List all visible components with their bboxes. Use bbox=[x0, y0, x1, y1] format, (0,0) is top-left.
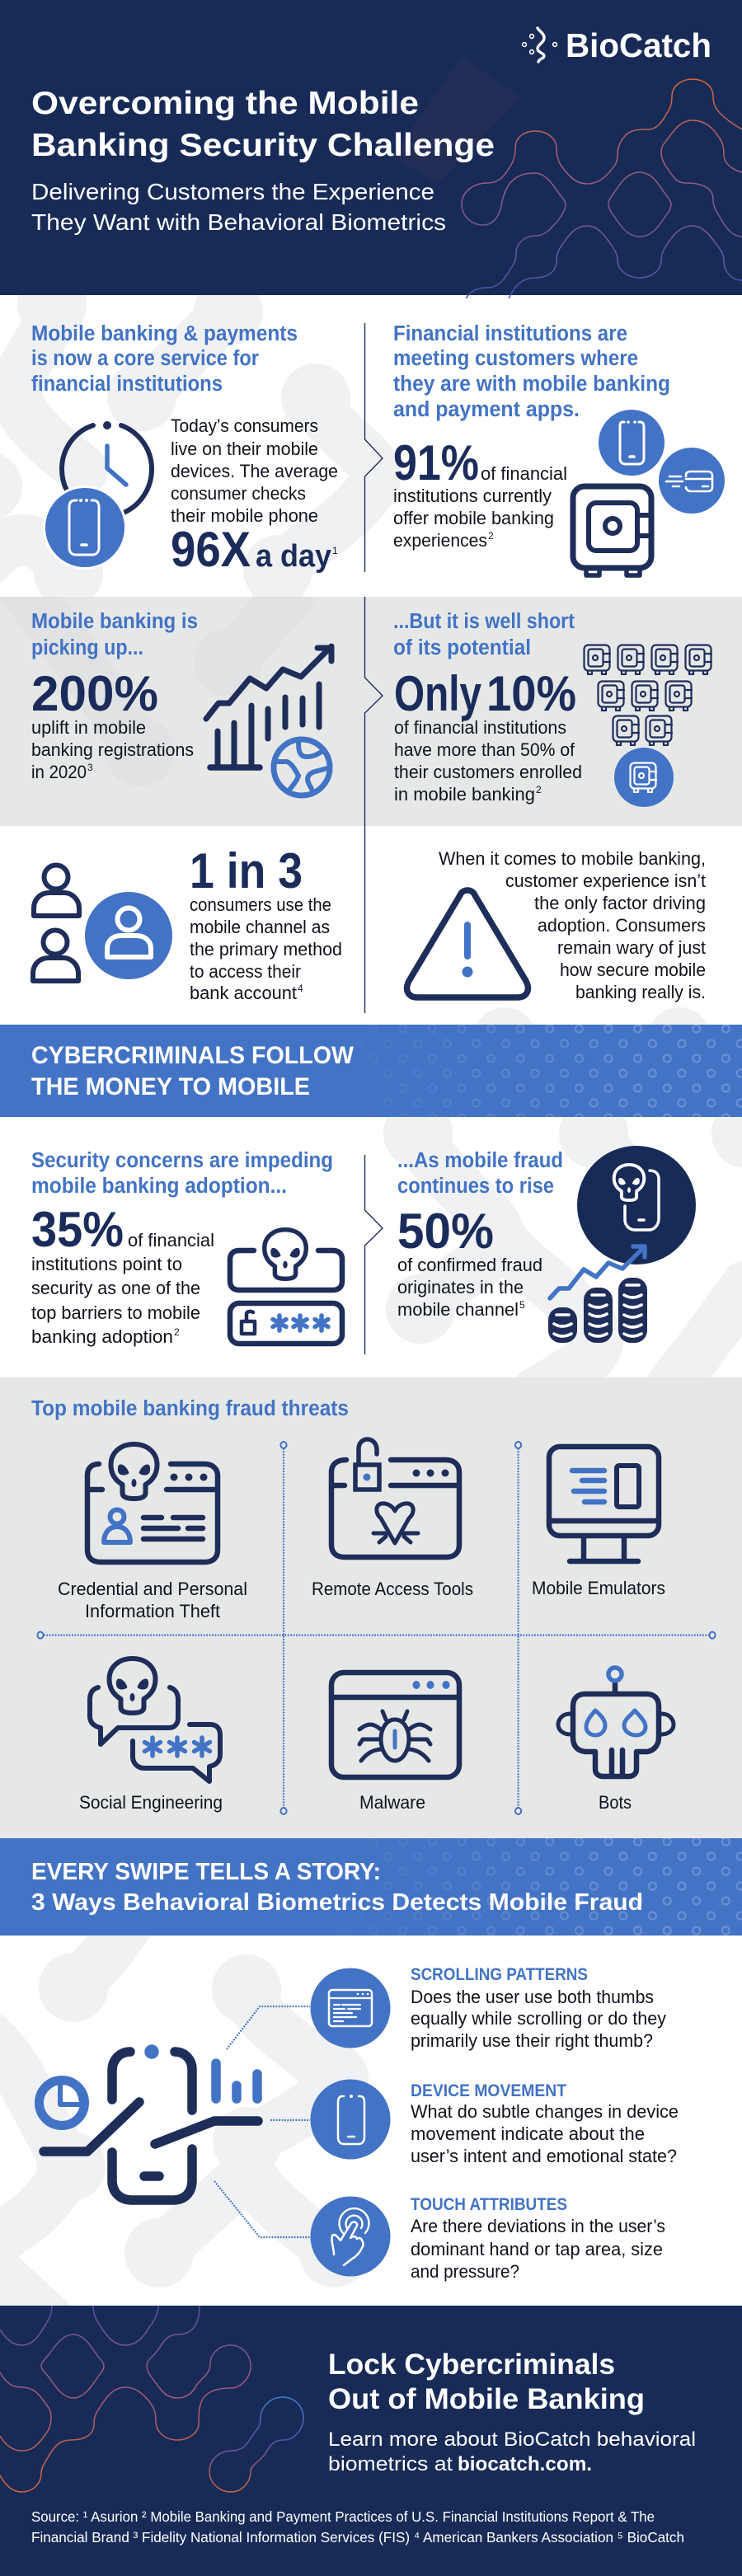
footer network lines bbox=[0, 2306, 303, 2492]
text: SCROLLING PATTERNS bbox=[411, 1965, 588, 1984]
background blobs: fraud section bbox=[383, 1117, 742, 1377]
text bbox=[411, 1965, 667, 2051]
text: today's consumers: devices. The average bbox=[171, 461, 338, 481]
label: Information Theft bbox=[85, 1601, 220, 1621]
text bbox=[439, 848, 707, 1002]
heading: 3 Ways Behavioral Biometrics Detects Mobile Fraud bbox=[31, 1889, 643, 1916]
title bbox=[31, 86, 495, 163]
background blobs: biometrics section bbox=[0, 1917, 369, 2320]
stat: only 10%: in mobile banking bbox=[394, 784, 535, 805]
label: Malware bbox=[359, 1792, 425, 1813]
stat: 50%: 5 bbox=[519, 1299, 525, 1311]
icon: pie chart bbox=[40, 2081, 84, 2125]
stat: 1 in 3: bank account bbox=[190, 983, 298, 1003]
text: today's consumers: their mobile phone bbox=[171, 505, 318, 526]
call to action heading: Out of Mobile Banking bbox=[328, 2383, 645, 2415]
panel: scrolling patterns bbox=[310, 1965, 667, 2051]
text: how secure mobile bbox=[560, 960, 706, 980]
call to action text: Learn more about BioCatch behavioral bbox=[328, 2428, 696, 2451]
stat: 200%: uplift in mobile bbox=[31, 717, 146, 738]
stat: 91%: offer mobile banking bbox=[393, 508, 554, 528]
label: Social Engineering bbox=[79, 1792, 223, 1813]
background blobs: top section bbox=[0, 270, 375, 626]
text: primarily use their right thumb? bbox=[411, 2030, 653, 2051]
icon: blue safe circle bbox=[614, 748, 674, 807]
subtitle: They Want with Behavioral Biometrics bbox=[31, 209, 446, 235]
text: the only factor driving bbox=[534, 893, 706, 913]
stat: 91%: 2 bbox=[488, 530, 494, 542]
heading: Mobile banking is bbox=[31, 610, 198, 633]
stat: 50%: 50% bbox=[397, 1204, 494, 1259]
stat: 35%: of financial bbox=[128, 1230, 214, 1250]
heading: continues to rise bbox=[397, 1175, 554, 1198]
panel: footer bbox=[0, 2306, 742, 2576]
stat: only 10% bbox=[394, 666, 582, 805]
stat: 1 in 3: 1 in 3 bbox=[190, 843, 303, 899]
heading: mobile banking adoption... bbox=[31, 1175, 287, 1198]
stat: 96X a day: a day bbox=[256, 539, 331, 574]
heading bbox=[393, 322, 670, 421]
icon: touch hand bbox=[310, 2196, 391, 2277]
panel: customer experience callout bbox=[407, 848, 707, 1002]
text bbox=[411, 2195, 665, 2282]
heading: Security concerns are impeding bbox=[31, 1149, 333, 1172]
stat: 50%: originates in the bbox=[397, 1277, 524, 1297]
background blobs: grey section bbox=[16, 577, 289, 786]
heading: picking up... bbox=[31, 636, 143, 659]
icon: rising chart and globe bbox=[206, 646, 331, 795]
heading: Top mobile banking fraud threats bbox=[31, 1397, 349, 1420]
sources: Financial Brand ³ Fidelity National Information Services (FIS) ⁴ American Bankers Association ⁵ BioCatch bbox=[31, 2529, 684, 2546]
illustration: phone with charts bbox=[40, 2006, 310, 2237]
stat: 200% bbox=[31, 666, 194, 782]
heading bbox=[31, 610, 198, 659]
icon: people bbox=[33, 866, 172, 981]
text: banking really is. bbox=[575, 982, 706, 1002]
text: today's consumers bbox=[171, 415, 338, 526]
stat: 200%: banking registrations bbox=[31, 739, 194, 760]
stat: 50%: of confirmed fraud bbox=[397, 1255, 542, 1275]
icon: bot bbox=[558, 1668, 674, 1776]
stat: only 10%: have more than 50% of bbox=[394, 739, 575, 760]
heading: financial institutions bbox=[31, 373, 223, 396]
icon: social engineering bbox=[90, 1659, 220, 1781]
stat: 96X a day: 1 bbox=[332, 545, 338, 556]
text: movement indicate about the bbox=[411, 2123, 645, 2144]
heading bbox=[31, 1149, 333, 1198]
panel: header bbox=[0, 0, 742, 298]
stat: 35% bbox=[31, 1202, 214, 1347]
text: What do subtle changes in device bbox=[411, 2101, 679, 2122]
call to action text: biocatch.com. bbox=[458, 2453, 592, 2475]
sources: Source: ¹ Asurion ² Mobile Banking and Payment Practices of U.S. Financial Institutions Report & The bbox=[31, 2508, 655, 2525]
stat: only 10%: of financial institutions bbox=[394, 717, 566, 738]
panel: security concerns bbox=[31, 1149, 342, 1347]
text: equally while scrolling or do they bbox=[411, 2008, 667, 2029]
heading: Mobile banking & payments bbox=[31, 322, 298, 345]
text: When it comes to mobile banking, bbox=[439, 848, 706, 869]
stat: 35%: security as one of the bbox=[31, 1278, 200, 1298]
panel: picking up bbox=[31, 610, 331, 795]
stat: 200%: 200% bbox=[31, 666, 158, 721]
stat: only 10%: 10% bbox=[486, 666, 576, 721]
label: Mobile Emulators bbox=[532, 1578, 665, 1598]
stat: only 10%: Only bbox=[394, 666, 482, 721]
call to action text: biometrics at bbox=[328, 2453, 453, 2475]
stat: 96X a day bbox=[171, 522, 338, 577]
stat: 1 in 3: to access their bbox=[190, 961, 301, 982]
heading: CYBERCRIMINALS FOLLOW bbox=[31, 1042, 355, 1069]
panel: device movement bbox=[310, 2079, 679, 2166]
label bbox=[58, 1579, 247, 1621]
stat: 1 in 3: mobile channel as bbox=[190, 917, 330, 937]
stat: 35%: banking adoption bbox=[31, 1326, 173, 1347]
icon: warning triangle bbox=[407, 890, 528, 997]
stat: 35%: top barriers to mobile bbox=[31, 1302, 200, 1323]
heading: of its potential bbox=[393, 636, 531, 659]
panel: top fraud threats bbox=[31, 1397, 716, 1814]
heading: they are with mobile banking bbox=[393, 373, 670, 396]
icon: grid of safes bbox=[584, 645, 711, 745]
text: TOUCH ATTRIBUTES bbox=[411, 2195, 567, 2214]
stat: 91%: of financial bbox=[481, 463, 567, 484]
stat: only 10%: their customers enrolled bbox=[394, 762, 582, 782]
label: Credential and Personal bbox=[58, 1579, 247, 1599]
heading: meeting customers where bbox=[393, 347, 638, 370]
icon: safe, phone and card bbox=[573, 410, 725, 575]
stat: 91%: experiences bbox=[393, 530, 487, 551]
panel: meeting customers bbox=[393, 322, 725, 575]
subtitle: Delivering Customers the Experience bbox=[31, 179, 434, 204]
text: dominant hand or tap area, size bbox=[411, 2239, 663, 2259]
call to action text bbox=[328, 2428, 696, 2475]
heading bbox=[31, 322, 298, 396]
icon: skull phone in circle bbox=[577, 1146, 696, 1265]
text: remain wary of just bbox=[557, 937, 707, 958]
header network lines bbox=[462, 79, 742, 298]
icon: mobile emulators bbox=[549, 1447, 659, 1561]
text: customer experience isn’t bbox=[505, 870, 707, 891]
title: Overcoming the Mobile bbox=[31, 86, 419, 121]
heading: EVERY SWIPE TELLS A STORY: bbox=[31, 1859, 381, 1885]
heading bbox=[31, 1042, 355, 1100]
heading bbox=[397, 1149, 563, 1198]
text: today's consumers: live on their mobile bbox=[171, 439, 318, 459]
text: and pressure? bbox=[411, 2261, 519, 2282]
logo: BioCatch bbox=[566, 26, 711, 64]
text: Does the user use both thumbs bbox=[411, 1987, 654, 2007]
icon: malware bbox=[331, 1673, 459, 1777]
panel: band cybercriminals bbox=[0, 1025, 742, 1117]
stat: 1 in 3: the primary method bbox=[190, 939, 342, 960]
dotted grid bbox=[37, 1442, 716, 1814]
text: user’s intent and emotional state? bbox=[411, 2146, 677, 2166]
icon: skull and password bbox=[230, 1230, 342, 1344]
stat: 1 in 3: 4 bbox=[298, 983, 303, 994]
icon: phone bbox=[310, 2079, 391, 2160]
stat: 96X a day: 96X bbox=[171, 522, 251, 577]
heading bbox=[393, 610, 575, 659]
stat: 35%: 35% bbox=[31, 1202, 124, 1257]
text bbox=[411, 2081, 679, 2166]
heading: THE MONEY TO MOBILE bbox=[31, 1073, 310, 1100]
stat: 50% bbox=[397, 1204, 542, 1320]
icon: scrolling window bbox=[310, 1968, 391, 2048]
stat: 200%: in 2020 bbox=[31, 762, 87, 782]
text: adoption. Consumers bbox=[538, 915, 706, 936]
stat: 200%: 3 bbox=[87, 762, 93, 773]
text: Are there deviations in the user’s bbox=[411, 2216, 665, 2236]
heading: ...But it is well short bbox=[393, 610, 575, 633]
sources bbox=[31, 2508, 684, 2546]
call to action heading bbox=[328, 2348, 645, 2415]
heading: is now a core service for bbox=[31, 347, 259, 370]
connectors bbox=[214, 2006, 310, 2237]
text: DEVICE MOVEMENT bbox=[411, 2081, 566, 2100]
stat: 1 in 3 bbox=[190, 843, 342, 1003]
panel: 1 in 3 bbox=[33, 843, 342, 1003]
stat: 91%: 91% bbox=[393, 435, 479, 490]
panel: well short bbox=[393, 610, 711, 807]
stat: 35%: 2 bbox=[174, 1326, 180, 1338]
stat: 91% bbox=[393, 435, 567, 551]
stat: 50%: mobile channel bbox=[397, 1299, 519, 1320]
title: Banking Security Challenge bbox=[31, 128, 495, 163]
text: today's consumers: consumer checks bbox=[171, 483, 306, 504]
divider: fraud section bbox=[364, 1155, 383, 1354]
subtitle bbox=[31, 179, 446, 235]
divider: top sections bbox=[364, 323, 383, 1013]
icon: remote access tools bbox=[331, 1439, 459, 1557]
heading: ...As mobile fraud bbox=[397, 1149, 563, 1172]
heading: Financial institutions are bbox=[393, 322, 627, 345]
label: Bots bbox=[599, 1792, 632, 1813]
stat: only 10%: 2 bbox=[536, 784, 542, 795]
icon: credential theft bbox=[87, 1444, 218, 1562]
background blobs: above band bbox=[477, 1007, 707, 1025]
call to action heading: Lock Cybercriminals bbox=[328, 2348, 615, 2381]
panel: band every swipe bbox=[0, 1838, 742, 1936]
icon: rising arrow and coins bbox=[548, 1246, 647, 1343]
stat: 91%: institutions currently bbox=[393, 486, 552, 506]
stat: 35%: institutions point to bbox=[31, 1254, 182, 1274]
heading: and payment apps. bbox=[393, 398, 580, 421]
icon: clock and phone bbox=[43, 421, 152, 570]
text: today's consumers: Today’s consumers bbox=[171, 415, 318, 436]
panel: touch attributes bbox=[310, 2195, 665, 2282]
stat: 1 in 3: consumers use the bbox=[190, 894, 331, 915]
panel: fraud continues to rise bbox=[397, 1146, 696, 1343]
heading bbox=[31, 1859, 643, 1916]
panel: core service bbox=[31, 322, 338, 577]
label: Remote Access Tools bbox=[312, 1579, 473, 1599]
